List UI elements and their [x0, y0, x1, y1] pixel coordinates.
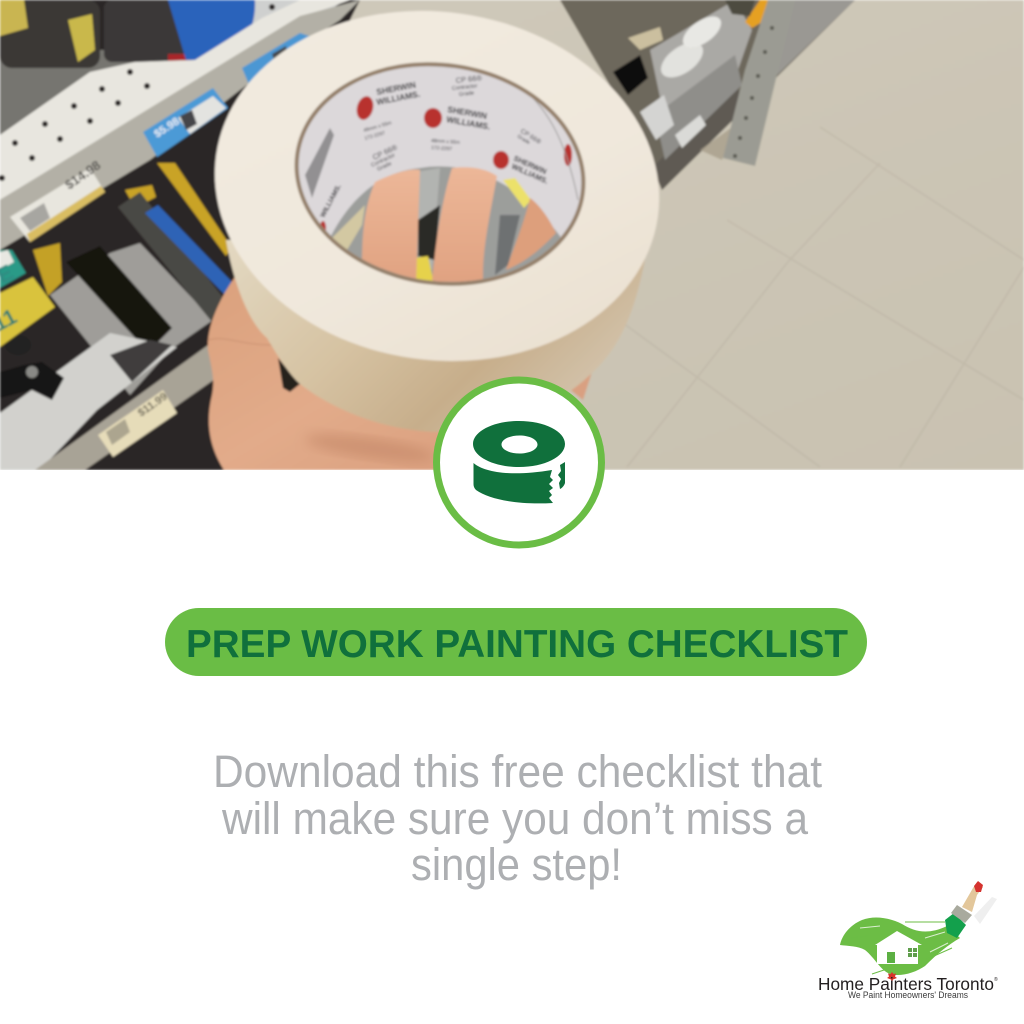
title pill [165, 608, 867, 676]
dark underside [0, 95, 260, 470]
core label printing: 172-2297 [364, 130, 386, 142]
photo: hand holding masking tape in a hardware store aisle [0, 0, 1024, 470]
blue shelf tags: $5.98 [152, 115, 182, 141]
core label printing: WILLIAMS. [375, 89, 421, 107]
lower shelf contents [0, 163, 232, 470]
body text: will make sure you don’t miss a [221, 793, 809, 844]
logo: tagline: We Paint Homeowners' Dreams [848, 990, 968, 1000]
core label printing: Grade [516, 134, 531, 146]
lower shelf lip and beige price tag: $11.99 [136, 391, 170, 419]
pegboard [0, 0, 350, 200]
left shelving [0, 0, 360, 470]
logo: green paint swoosh [840, 917, 960, 975]
floor tiles [349, 0, 1024, 470]
logo: Home Painters Toronto [818, 881, 998, 1000]
blue shelf tags [143, 33, 315, 157]
shelf lip [0, 0, 360, 250]
masking tape roll [212, 10, 660, 432]
body text: Download this free checklist that [213, 746, 822, 797]
core label printing: 172-2297 [431, 145, 453, 152]
icon: tape roll [473, 421, 565, 503]
core label printing: Grade [459, 90, 474, 98]
logo: brush shadow [974, 897, 997, 924]
inside of the core [297, 64, 583, 284]
title text: PREP WORK PAINTING CHECKLIST [186, 623, 848, 666]
logo: house [875, 931, 922, 964]
body text [213, 746, 822, 890]
cardboard core rim [293, 61, 587, 287]
right shelving [560, 0, 855, 190]
tape top face [212, 10, 660, 362]
logo: paint brush [945, 881, 983, 938]
lower shelf lip and beige price tag [35, 340, 225, 470]
logo: maple leaf [887, 972, 897, 981]
core label printing: SHERWIN [512, 154, 548, 176]
logo: wordmark: Home Painters Toronto [818, 974, 994, 994]
steel upright post [723, 0, 795, 166]
core label printing: WILLIAMS. [320, 183, 343, 219]
core label printing [305, 73, 572, 235]
SALE sign [0, 250, 55, 347]
core label printing: WILLIAMS. [510, 162, 550, 186]
product rolls on upper shelf [0, 0, 345, 68]
core label printing: Contractor [370, 152, 396, 169]
core label printing: CP 66® [519, 127, 543, 146]
core label printing: CP 66® [371, 142, 399, 162]
core label printing: SHERWIN [375, 80, 417, 97]
tape side wall [226, 225, 650, 432]
core label printing: 48mm x 55m [363, 120, 392, 134]
icon badge: tape roll in green circle [436, 380, 602, 545]
white price tag $14.98 [10, 157, 105, 242]
core label printing: WILLIAMS. [446, 114, 491, 132]
white price tag $14.98: $14.98 [62, 157, 103, 192]
core label printing: CP 66® [455, 73, 483, 85]
hand [208, 277, 612, 470]
fingers [362, 170, 420, 284]
logo: registered mark: ® [994, 976, 998, 983]
core label printing: Grade [376, 161, 393, 173]
body text: single step! [411, 839, 622, 890]
view through the roll [330, 166, 562, 280]
core label printing: SHERWIN [447, 104, 488, 121]
core label printing: Contractor [452, 83, 478, 92]
core label printing: 48mm x 55m [431, 138, 460, 146]
